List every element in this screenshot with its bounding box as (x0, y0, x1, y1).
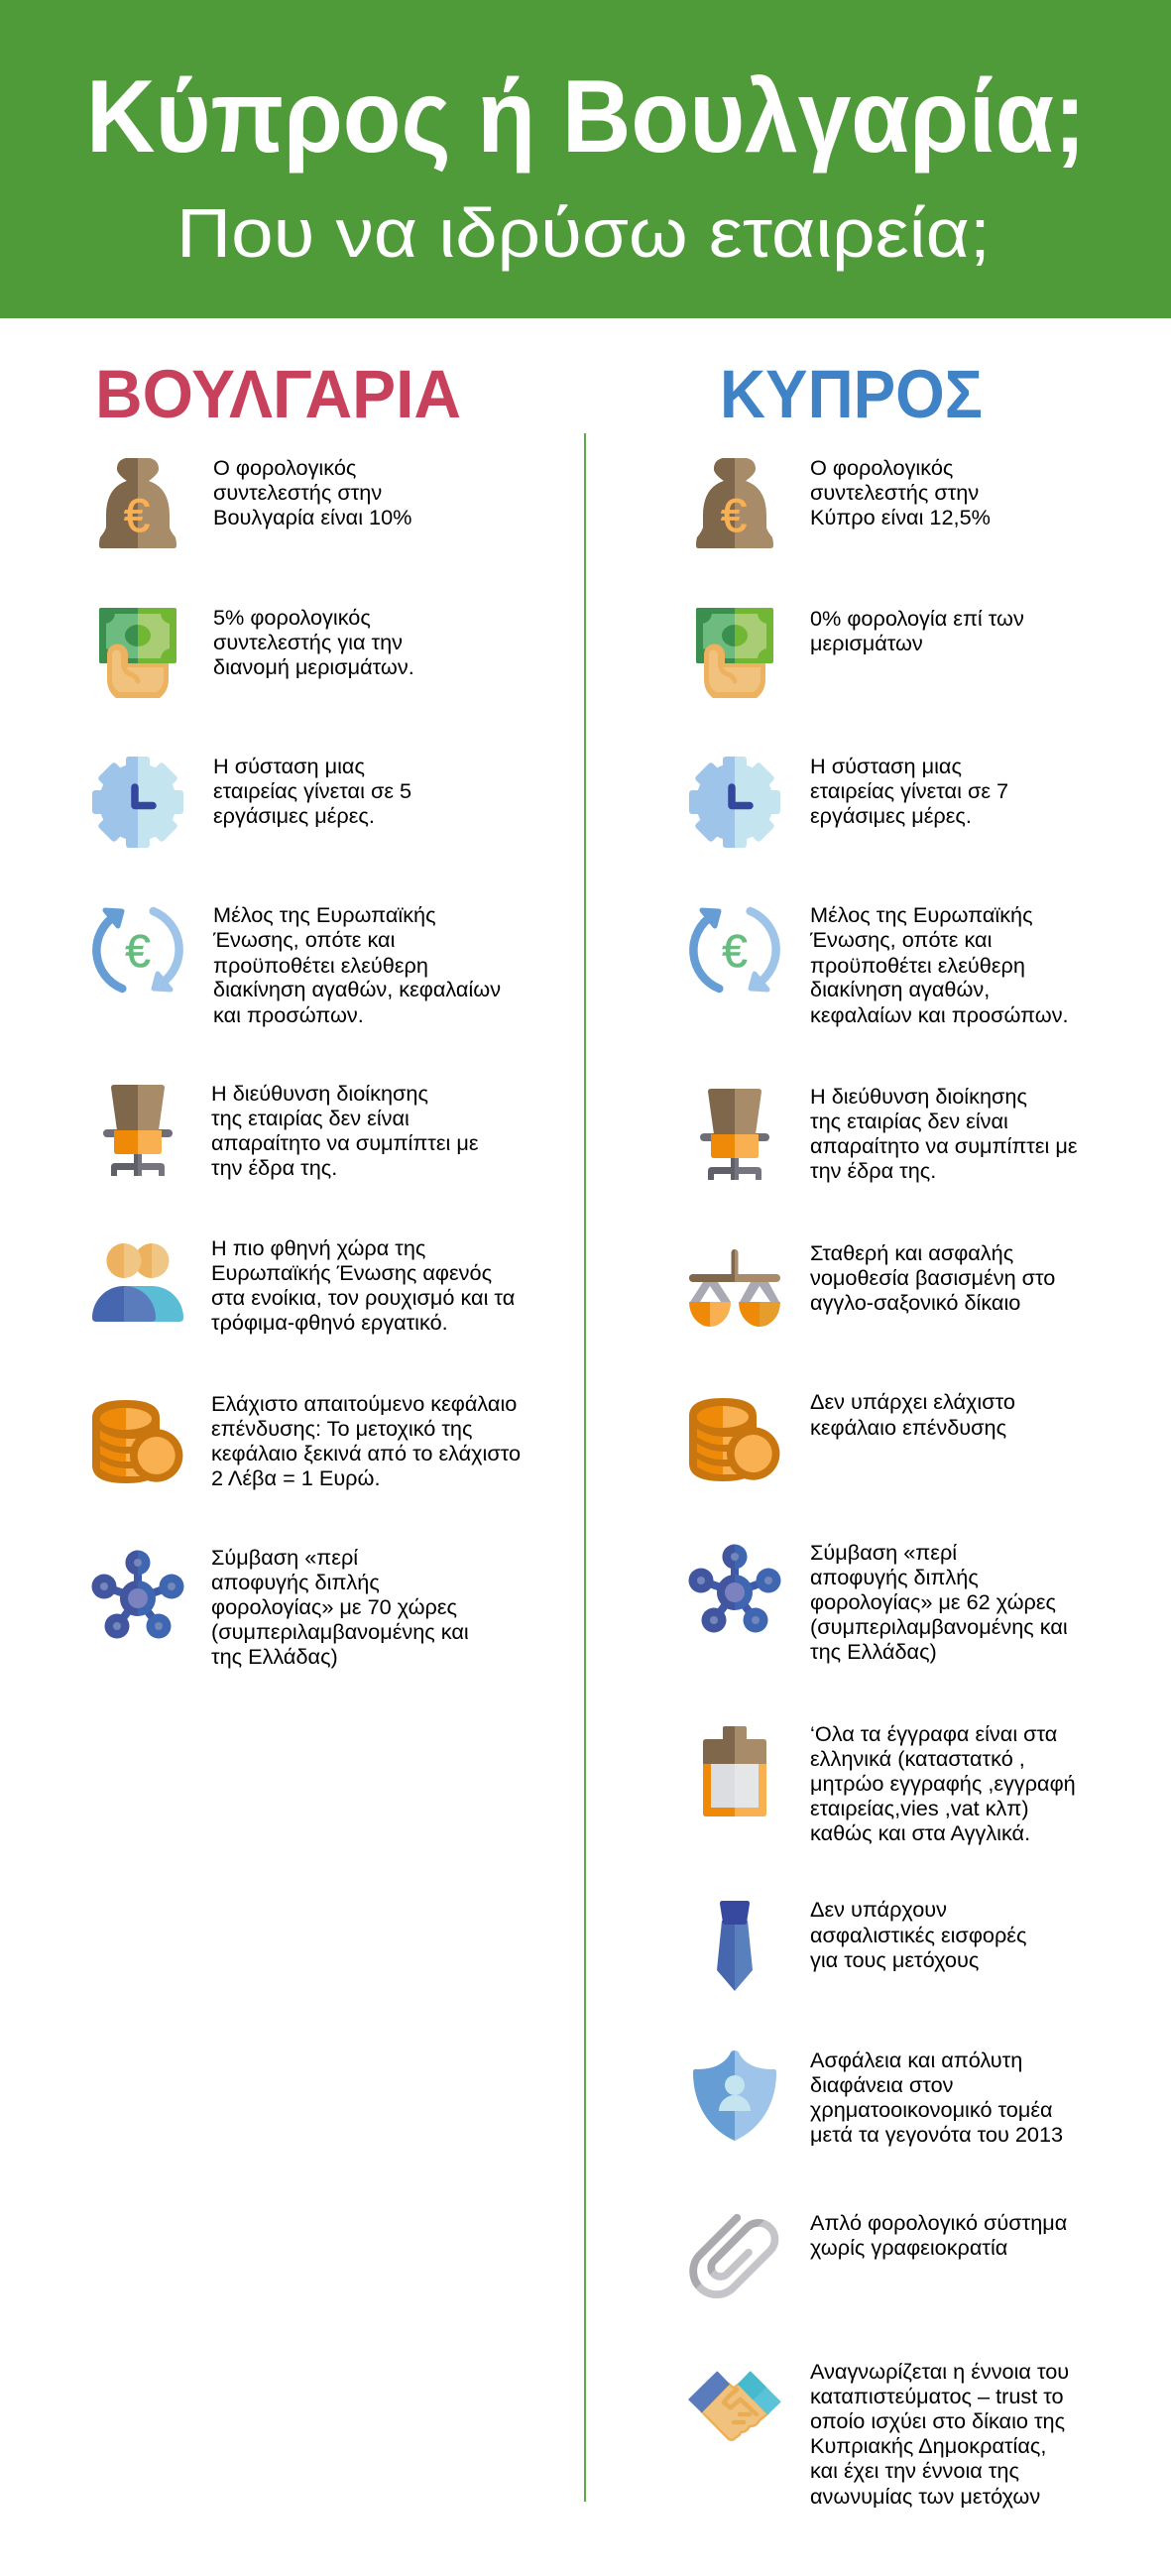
text: security and transparency: χρηματοοικονομικό τομέα (810, 2097, 1053, 2122)
text: setup time: εταιρείας γίνεται σε 5 (213, 778, 411, 803)
text: documents: ελληνικά (καταστατκό , (810, 1746, 1025, 1771)
text: setup time: Η σύσταση μιας (213, 754, 365, 778)
text: EU member: διακίνηση αγαθών, (810, 977, 990, 1001)
icon: people (92, 1243, 183, 1322)
text: simple tax system: χωρίς γραφειοκρατία (810, 2235, 1007, 2260)
text: trust: Κυπριακής Δημοκρατίας, (810, 2433, 1046, 2458)
text: trust: ανωνυμίας των μετόχων (810, 2484, 1040, 2509)
icon: money bag: € (721, 489, 747, 541)
icon: coins (92, 1400, 182, 1483)
text: EU member: Ένωσης, οπότε και (212, 927, 396, 952)
text: setup time: εργάσιμες μέρες. (810, 803, 972, 828)
icon: handshake (689, 2372, 780, 2440)
text: tax rate: Βουλγαρία είναι 10% (213, 505, 411, 529)
text: stable legislation: Σταθερή και ασφαλής (810, 1240, 1013, 1265)
icon: euro cycle (96, 910, 179, 990)
text: dividends: 0% φορολογία επί των (810, 606, 1024, 631)
text: management seat: Η διεύθυνση διοίκησης (211, 1081, 428, 1106)
text: management seat: απαραίτητο να συμπίπτει με (810, 1133, 1078, 1158)
icon: money bag (696, 458, 773, 548)
icon: network (91, 1551, 184, 1638)
text: management seat: απαραίτητο να συμπίπτει με (211, 1130, 479, 1155)
text: management seat: Η διεύθυνση διοίκησης (810, 1084, 1027, 1109)
panel: Bulgaria column (91, 455, 521, 1669)
icon: cash in hand (696, 608, 773, 698)
text: cheapest country: Η πιο φθηνή χώρα της (211, 1235, 425, 1260)
text: stable legislation: νομοθεσία βασισμένη στο (810, 1265, 1055, 1290)
heading: Bulgaria: ΒΟΥΛΓΑΡΙΑ (95, 356, 461, 432)
text: double tax treaty: φορολογίας» με 62 χώρες (810, 1589, 1056, 1614)
text: dividends: μερισμάτων (810, 631, 923, 655)
text: double tax treaty: της Ελλάδας) (211, 1644, 338, 1669)
text: minimum capital: επένδυσης: Το μετοχικό της (211, 1416, 472, 1441)
text: security and transparency: μετά τα γεγονότα του 2013 (810, 2122, 1063, 2147)
text: tax rate: συντελεστής στην (810, 480, 979, 505)
text: setup time: εταιρείας γίνεται σε 7 (810, 778, 1008, 803)
text: EU member: Μέλος της Ευρωπαϊκής (213, 902, 436, 927)
text: no minimum capital: κεφάλαιο επένδυσης (810, 1415, 1006, 1440)
text: tax rate: συντελεστής στην (213, 480, 382, 505)
text: EU member: προϋποθέτει ελεύθερη (810, 953, 1025, 978)
text: cheapest country: Ευρωπαϊκής Ένωσης αφενός (211, 1260, 492, 1285)
text: double tax treaty: Σύμβαση «περί (211, 1545, 358, 1570)
icon: clipboard (703, 1726, 766, 1816)
text: cheapest country: τρόφιμα-φθηνό εργατικό. (211, 1310, 448, 1335)
text: no contributions: ασφαλιστικές εισφορές (810, 1923, 1026, 1947)
text: management seat: της εταιρίας δεν είναι (810, 1109, 1008, 1133)
text: management seat: της εταιρίας δεν είναι (211, 1106, 410, 1130)
icon: necktie (717, 1901, 753, 1991)
text: tax rate: Κύπρο είναι 12,5% (810, 505, 991, 529)
text: security and transparency: Ασφάλεια και απόλυτη (810, 2048, 1022, 2072)
text: EU member: Μέλος της Ευρωπαϊκής (810, 902, 1033, 927)
icon: money bag (99, 458, 176, 548)
text: management seat: την έδρα της. (810, 1158, 936, 1183)
subtitle: Που να ιδρύσω εταιρεία; (176, 194, 991, 272)
text: documents: καθώς και στα Αγγλικά. (810, 1820, 1030, 1845)
text: double tax treaty: φορολογίας» με 70 χώρες (211, 1594, 457, 1619)
icon: coins (689, 1398, 779, 1481)
text: dividends: συντελεστής για την (213, 630, 403, 654)
icon: gear clock (689, 757, 780, 848)
text: management seat: την έδρα της. (211, 1155, 337, 1180)
text: no contributions: για τους μετόχους (810, 1947, 979, 1972)
panel: Cyprus column (688, 455, 1078, 2509)
icon: money bag: € (124, 489, 150, 541)
header banner (0, 0, 1171, 318)
icon: scales (689, 1249, 780, 1327)
text: double tax treaty: (συμπεριλαμβανομένης και (211, 1619, 469, 1644)
text: minimum capital: Ελάχιστο απαιτούμενο κεφάλαιο (211, 1391, 517, 1416)
text: EU member: διακίνηση αγαθών, κεφαλαίων (213, 977, 501, 1001)
text: simple tax system: Απλό φορολογικό σύστημα (810, 2210, 1067, 2235)
text: documents: εταιρείας,vies ,vat κλπ) (810, 1796, 1029, 1820)
icon: gear clock (92, 757, 183, 848)
text: trust: Αναγνωρίζεται η έννοια του (810, 2359, 1069, 2384)
text: EU member: και προσώπων. (213, 1002, 364, 1027)
text: EU member: Ένωσης, οπότε και (809, 927, 993, 952)
text: trust: καταπιστεύματος – trust το (810, 2384, 1064, 2408)
text: tax rate: Ο φορολογικός (213, 455, 356, 480)
text: setup time: εργάσιμες μέρες. (213, 803, 375, 828)
text: EU member: προϋποθέτει ελεύθερη (213, 953, 428, 978)
icon: euro cycle (693, 910, 776, 990)
text: double tax treaty: αποφυγής διπλής (810, 1565, 979, 1589)
icon: euro cycle: € (125, 925, 151, 977)
text: minimum capital: κεφάλαιο ξεκινά από το ελάχιστο (211, 1441, 521, 1465)
text: setup time: Η σύσταση μιας (810, 754, 962, 778)
text: double tax treaty: Σύμβαση «περί (810, 1540, 957, 1565)
text: trust: οποίο ισχύει στο δίκαιο της (810, 2408, 1065, 2433)
text: cheapest country: στα ενοίκια, τον ρουχισμό και τα (211, 1285, 515, 1310)
text: tax rate: Ο φορολογικός (810, 455, 953, 480)
text: documents: μητρώο εγγραφής ,εγγραφή (810, 1771, 1076, 1796)
text: trust: και έχει την έννοια της (810, 2458, 1019, 2483)
icon: shield (693, 2050, 776, 2141)
text: dividends: 5% φορολογικός (213, 605, 371, 630)
icon: paperclip (693, 2218, 774, 2294)
text: double tax treaty: της Ελλάδας) (810, 1639, 937, 1664)
text: documents: ‘Ολα τα έγγραφα είναι στα (810, 1721, 1057, 1746)
icon: office chair (700, 1089, 769, 1180)
text: EU member: κεφαλαίων και προσώπων. (810, 1002, 1069, 1027)
text: dividends: διανομή μερισμάτων. (213, 654, 414, 679)
text: security and transparency: διαφάνεια στον (810, 2072, 954, 2097)
heading: Cyprus: ΚΥΠΡΟΣ (720, 356, 983, 432)
icon: cash in hand (99, 608, 176, 698)
icon: network (688, 1545, 781, 1632)
text: no contributions: Δεν υπάρχουν (810, 1897, 947, 1922)
text: double tax treaty: αποφυγής διπλής (211, 1570, 380, 1594)
text: minimum capital: 2 Λέβα = 1 Ευρώ. (211, 1465, 380, 1490)
text: no minimum capital: Δεν υπάρχει ελάχιστο (810, 1389, 1015, 1414)
text: double tax treaty: (συμπεριλαμβανομένης και (810, 1614, 1068, 1639)
title: Κύπρος ή Βουλγαρία; (86, 59, 1086, 175)
icon: euro cycle: € (722, 925, 748, 977)
text: stable legislation: αγγλο-σαξονικό δίκαιο (810, 1290, 1020, 1315)
icon: office chair (103, 1085, 173, 1176)
